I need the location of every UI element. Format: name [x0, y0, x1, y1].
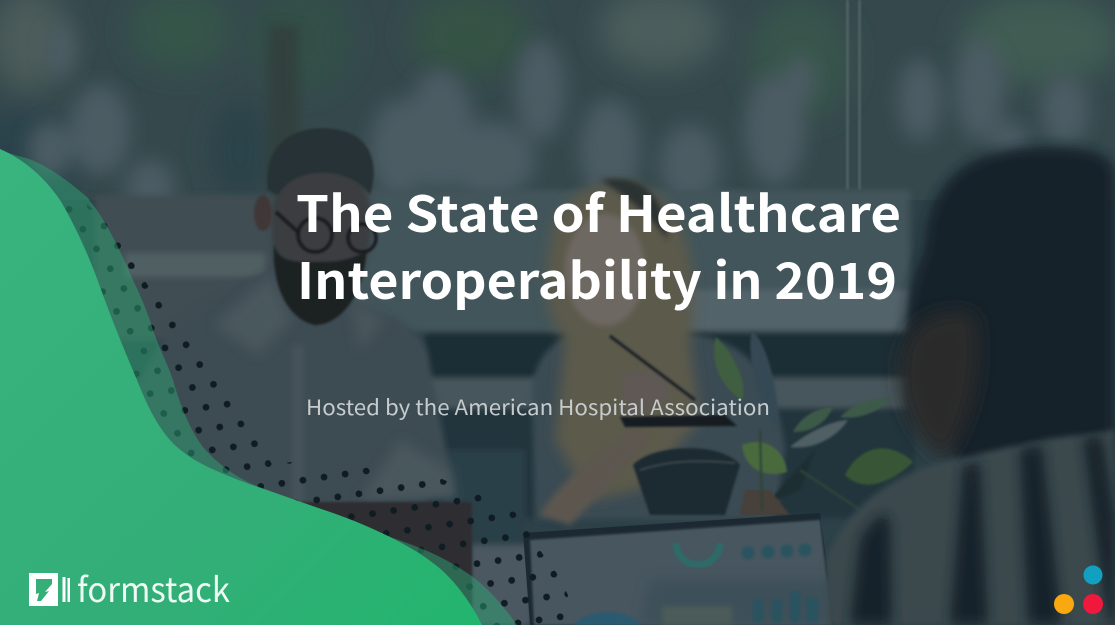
- icon: formstack mark: [29, 573, 70, 606]
- person: foreground with striped top: [826, 147, 1115, 625]
- decorative translucent green wave: [0, 150, 517, 625]
- person: woman with blonde hair: [532, 178, 785, 525]
- laptop on table: [523, 513, 835, 625]
- title: Interoperability in 2019: [297, 242, 897, 314]
- dark table edge: [288, 502, 472, 625]
- icon: three coloured dots: [1054, 566, 1103, 614]
- logo: formstack: [29, 563, 230, 612]
- subtitle: Hosted by the American Hospital Association: [306, 392, 770, 422]
- person: man with beard: [130, 128, 455, 510]
- green wave shape: [0, 149, 482, 625]
- background: wall band, dark shelf and lower wall: [95, 190, 915, 625]
- background: foliage: [0, 0, 1115, 220]
- dot pattern: [66, 204, 568, 625]
- wordmark: formstack: [77, 563, 230, 612]
- title: The State of Healthcare: [296, 175, 901, 247]
- title: [296, 175, 901, 314]
- plant: leaves and pot: [620, 330, 913, 515]
